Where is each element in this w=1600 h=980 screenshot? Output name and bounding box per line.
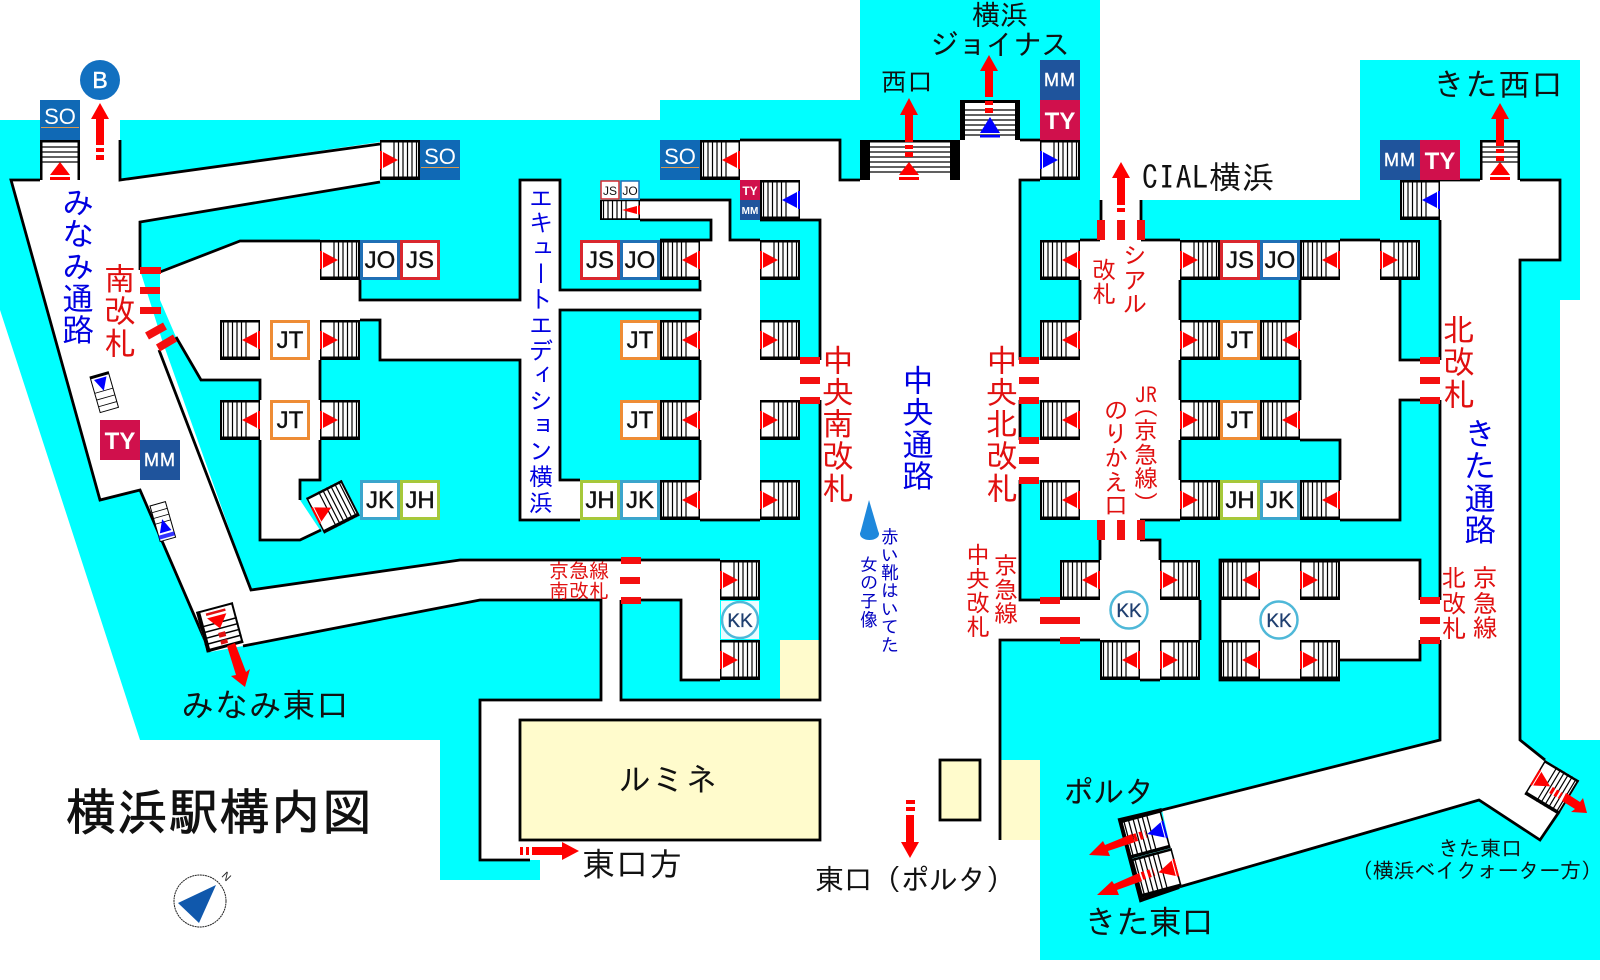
gate: 京急線南改札: [620, 557, 641, 604]
badge: MM top: [1040, 60, 1080, 100]
stairs: bay quarter: [1524, 760, 1579, 815]
badge: JS centre: JS: [586, 247, 614, 274]
stairs: small JS JO: [600, 200, 640, 220]
badge: JK centre: [622, 482, 658, 518]
label: 中央南改札: 中央南改札: [822, 343, 854, 503]
badge: JS north: [1222, 242, 1258, 278]
stairs: central south 8: [760, 480, 800, 520]
stairs: central south 7: [660, 480, 700, 520]
stairs: central south 2: [760, 240, 800, 280]
gate: 京急線北改札: [1420, 597, 1440, 644]
arrow: きた東口: [1097, 872, 1154, 895]
stairs: KK south lower: [720, 640, 760, 680]
icon: compass: [174, 870, 233, 927]
label: 中央通路: 中央通路: [902, 363, 934, 491]
panel: cream building patches: [780, 640, 1040, 840]
label: 京急線南改札: [549, 561, 609, 601]
badge: MM south: [140, 440, 180, 480]
stairs: kita east outer frame: [1120, 810, 1179, 900]
badge: small JO: JO: [622, 184, 638, 198]
badge: small TY: [740, 180, 760, 200]
stairs: porta blue: [1120, 810, 1171, 859]
badge: TY top: [1040, 100, 1080, 140]
badge: JO south: JO: [365, 247, 395, 274]
badge: JK centre: JK: [626, 487, 654, 514]
stairs: kita west exit: [1480, 140, 1520, 180]
badge: JK south: JK: [366, 487, 394, 514]
label: 東口（ポルタ）: 東口（ポルタ）: [815, 865, 1015, 894]
stairs: KK central b: [1160, 560, 1200, 600]
badge: JK south: [362, 482, 398, 518]
badge: JK north: JK: [1266, 487, 1294, 514]
badge: TY kita: TY: [1425, 148, 1455, 175]
stairs: minami upper blue: [90, 372, 118, 413]
stairs: KK central d: [1160, 640, 1200, 680]
stairs: TY MM central: [760, 180, 800, 220]
badge: JO centre: JO: [625, 247, 655, 274]
badge: JT south upper: JT: [277, 327, 304, 354]
gate: 京急線中央改札: [1040, 597, 1080, 644]
stairs: JT north b: [1260, 320, 1300, 360]
badge: JO north: [1262, 242, 1298, 278]
badge: KK central: KK: [1116, 601, 1142, 622]
gate: 中央北改札: [1019, 357, 1039, 484]
badge: KK central: [1110, 592, 1148, 628]
badge: JT north lower: JT: [1227, 407, 1254, 434]
stairs: KK north d: [1300, 640, 1340, 680]
stairs: central south 1: [660, 240, 700, 280]
label: みなみ通路: みなみ通路: [62, 185, 94, 345]
badge: JT north lower: [1222, 402, 1258, 438]
stairs: north centre 3: [1040, 400, 1080, 440]
stairs: TY MM north central: [1040, 140, 1080, 180]
badge: JH south: JH: [405, 487, 435, 514]
badge: B subway: [80, 60, 120, 100]
label: 京急線 north: 京急線: [1472, 565, 1498, 640]
stairs: SO west: [380, 140, 420, 180]
icon: compass: N: [219, 870, 233, 884]
line badges: [40, 60, 1460, 639]
stairs: JT north d: [1260, 400, 1300, 440]
badge: JS north: JS: [1226, 247, 1254, 274]
badge: SO central: [660, 140, 700, 180]
badge: TY south: TY: [105, 428, 135, 455]
badge: MM south: MM: [144, 450, 176, 470]
stairs: central south 6: [760, 400, 800, 440]
badge: JT centre lower: [622, 402, 658, 438]
badge: small MM: [740, 200, 760, 220]
badge: JO centre: [622, 242, 658, 278]
stairs: JK south diagonal: [306, 480, 360, 534]
gate: 中央南改札: [800, 357, 820, 404]
stairs: north room top: [1380, 240, 1420, 280]
stairs: kita east red: [1131, 848, 1182, 898]
badge: small JS: JS: [603, 184, 617, 198]
badge: JH centre: JH: [585, 487, 615, 514]
arrow: 東口ポルタ: [901, 800, 919, 858]
label: のりかえ口: のりかえ口: [1104, 397, 1128, 517]
label: きた通路: きた通路: [1464, 417, 1496, 545]
badge: MM kita: [1380, 140, 1420, 180]
stairs: central south 3: [660, 320, 700, 360]
stairs: MM TY kita: [1400, 180, 1440, 220]
badge: small JO: [621, 181, 639, 199]
stairs: KK south upper: [720, 560, 760, 600]
badge: JS south: [402, 242, 438, 278]
badge: KK south: [721, 601, 759, 639]
badge: JH north: [1222, 482, 1258, 518]
stairs: SO south: [40, 140, 80, 180]
stairs: north centre 1: [1040, 240, 1080, 280]
badge: JO north: JO: [1265, 247, 1295, 274]
label: 西口: 西口: [881, 69, 933, 95]
badge: small MM: MM: [742, 206, 758, 217]
stairs: KK central a: [1060, 560, 1100, 600]
stairs: JH north: [1180, 480, 1220, 520]
label: 京急線南改札: 南改札: [549, 581, 609, 601]
arrow: ポルタ: [1089, 834, 1146, 856]
stairs: north centre 4: [1040, 480, 1080, 520]
icon: statue cone: [860, 500, 879, 540]
gate: 南改札: [140, 267, 175, 348]
arrow: 西口: [900, 98, 918, 157]
building: ルミネ: ルミネ: [619, 763, 717, 795]
stairs: central south 5: [660, 400, 700, 440]
label: 改札 cial: 改札: [1092, 257, 1116, 305]
label: CIAL横浜: CIAL横浜: [1142, 161, 1274, 193]
label: 女の子像: 女の子像: [860, 555, 878, 628]
stairs: JT d: [320, 400, 360, 440]
stairs: KK north c: [1220, 640, 1260, 680]
badge: KK north: [1260, 602, 1298, 638]
label: エキュートエディション横浜: エキュートエディション横浜: [529, 185, 553, 515]
badge: JS centre: [582, 242, 618, 278]
label: みなみ東口: みなみ東口: [181, 688, 349, 721]
badge: SO central: SO: [664, 144, 696, 169]
badge: SO south: [40, 100, 80, 140]
arrow: to B line: [91, 103, 109, 160]
stairs: JT c: [220, 400, 260, 440]
badge: JH north: JH: [1225, 487, 1255, 514]
badge: JT centre lower: JT: [627, 407, 654, 434]
label: 北改札 keikyu: 北改札: [1442, 565, 1466, 640]
arrow: Joinus: [980, 55, 998, 113]
badge: JK north: [1262, 482, 1298, 518]
badge: TY top: TY: [1045, 108, 1075, 135]
badge: B subway: B: [92, 67, 108, 93]
badge: JT north upper: [1222, 322, 1258, 358]
stairs: KK north b: [1300, 560, 1340, 600]
label: 北改札: 北改札: [1443, 313, 1475, 409]
badge: MM kita: MM: [1384, 150, 1416, 170]
stairs: SO central: [700, 140, 740, 180]
label: 京急線 central: 京急線: [994, 553, 1018, 625]
label: きた西口: きた西口: [1433, 68, 1563, 100]
badge: small TY: TY: [742, 184, 758, 198]
walls: [11, 140, 1560, 887]
label: シアル: シアル: [1123, 243, 1147, 315]
gate: 北改札: [1420, 357, 1440, 404]
badge: JT centre upper: [622, 322, 658, 358]
stairs: JO south: [320, 240, 360, 280]
stairs: Joinus: [960, 100, 1020, 140]
panel: walkable concourses: [11, 100, 1560, 887]
stairs: minami lower blue: [150, 502, 176, 542]
building: small kiosk: [940, 760, 980, 820]
label: ジョイナス: ジョイナス: [930, 30, 1070, 59]
stairs: JT north c: [1180, 400, 1220, 440]
stairs: JT a: [220, 320, 260, 360]
gate: シアル改札: [1097, 220, 1145, 240]
building: ルミネ: [520, 720, 820, 840]
stairs: JS JO north right: [1300, 240, 1340, 280]
arrow: みなみ東口: [227, 643, 250, 687]
badge: JT centre upper: JT: [627, 327, 654, 354]
label: 赤い靴はいてた: 赤い靴はいてた: [881, 527, 899, 653]
stairs: KK central c: [1100, 640, 1140, 680]
gate: JR京急線のりかえ口: [1097, 520, 1145, 540]
arrow: CIAL: [1112, 162, 1130, 212]
arrow: ベイクォーター: [1551, 790, 1587, 813]
label: きた東口: きた東口: [1084, 905, 1214, 938]
stairs: west exit: [860, 140, 960, 180]
badge: SO south: SO: [44, 104, 76, 129]
label: 南改札: 南改札: [104, 262, 136, 358]
badge: SO west: [420, 140, 460, 180]
label: 横浜ベイクォーター方: （横浜ベイクォーター方）: [1352, 860, 1600, 881]
badge: SO west: SO: [424, 144, 456, 169]
badge: TY kita: [1420, 140, 1460, 180]
badge: KK north: KK: [1266, 611, 1292, 632]
stairs: JS JO north left: [1180, 240, 1220, 280]
label: 横浜: 横浜: [972, 1, 1028, 29]
badge: JO south: [362, 242, 398, 278]
badge: JT south lower: JT: [277, 407, 304, 434]
badge: JH south: [402, 482, 438, 518]
badge: JT north upper: JT: [1227, 327, 1254, 354]
label: 中央北改札: 中央北改札: [986, 343, 1018, 503]
stairs: minami east: [196, 602, 244, 653]
stairs: JT b: [320, 320, 360, 360]
label: 京急線 parenthetical: （京急線）: [1134, 394, 1158, 514]
badge: JH centre: [582, 482, 618, 518]
stairs group: [40, 100, 1579, 900]
label: JR: JR: [1135, 384, 1157, 406]
stairs: JK north: [1300, 480, 1340, 520]
badge: small JS: [601, 181, 619, 199]
badge: MM top: MM: [1044, 70, 1076, 90]
label: きた東口 small: きた東口: [1438, 838, 1522, 859]
stairs: north centre 2: [1040, 320, 1080, 360]
ticket gates: [140, 220, 1440, 644]
badge: KK south: KK: [727, 611, 753, 632]
arrow: 東口方: [520, 842, 579, 860]
badge: TY south: [100, 420, 140, 460]
badge: JT south upper: [272, 322, 308, 358]
label: ポルタ: ポルタ: [1063, 776, 1155, 807]
stairs: KK north a: [1220, 560, 1260, 600]
label: 中央改札 keikyu: 中央改札: [966, 542, 990, 638]
badge: JT south lower: [272, 402, 308, 438]
stairs: JT north a: [1180, 320, 1220, 360]
stairs: central south 4: [760, 320, 800, 360]
arrow: きた西口: [1491, 103, 1509, 161]
badge: JS south: JS: [406, 247, 434, 274]
label: ルミネ east direction 東口方: 東口方: [582, 847, 682, 880]
title: 横浜駅構内図: [66, 787, 372, 837]
label: 京急線南改札: 京急線: [549, 561, 609, 581]
